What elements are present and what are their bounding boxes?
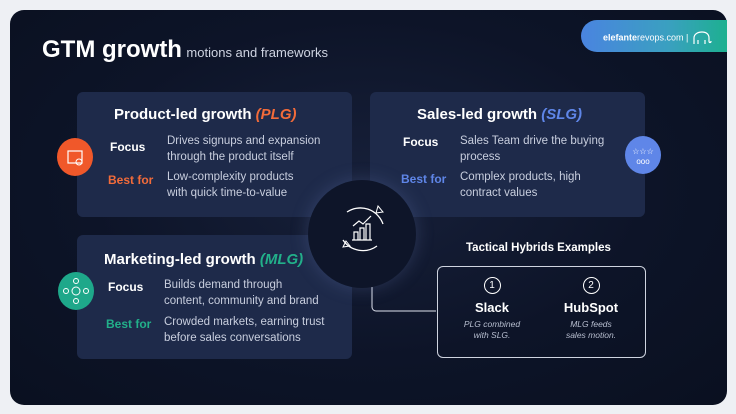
- icon: SLG team: [625, 136, 661, 174]
- panel: PLG: Focus: [110, 140, 145, 154]
- heading: tactical hybrids: Tactical Hybrids Examples: [466, 242, 611, 254]
- example: HubSpot: [564, 277, 618, 340]
- icon: SLG team: ооо: [636, 157, 650, 166]
- arrow: connector: [372, 287, 436, 312]
- panel: SLG: Complex products, high: [460, 171, 581, 183]
- panel: SLG: contract values: [460, 186, 537, 198]
- panel: PLG: Best for: [108, 173, 153, 187]
- panel: MLG: before sales conversations: [164, 332, 301, 344]
- panel: hybrid examples: [437, 266, 646, 358]
- panel: SLG: Sales-led growth (SLG): [417, 106, 582, 123]
- panel: PLG: with quick time-to-value: [167, 186, 287, 198]
- example: Slack: [464, 277, 520, 340]
- panel: PLG: [77, 92, 352, 217]
- panel: MLG: Focus: [108, 280, 143, 294]
- example: Slack: PLG combined: [464, 319, 520, 329]
- example: Slack: with SLG.: [474, 330, 510, 340]
- panel: SLG: Sales Team drive the buying: [460, 135, 604, 147]
- panel: SLG: process: [460, 150, 500, 162]
- title: GTM growth motions and frameworks: [42, 36, 328, 63]
- logo badge: elefanterevops.com |: [603, 32, 688, 42]
- panel: PLG: Low-complexity products: [167, 171, 294, 183]
- icon: SLG team: ☆☆☆: [632, 147, 654, 156]
- example: HubSpot: HubSpot: [564, 300, 618, 315]
- icon: center growth circle: [308, 180, 416, 288]
- logo badge: [581, 20, 727, 52]
- panel: PLG: through the product itself: [167, 150, 294, 162]
- panel: MLG: content, community and brand: [164, 294, 319, 306]
- example: Slack: 1: [489, 280, 495, 291]
- panel: SLG: Focus: [403, 135, 438, 149]
- panel: PLG: Drives signups and expansion: [167, 135, 320, 147]
- icon: MLG network: [58, 272, 94, 310]
- panel: PLG: Product-led growth (PLG): [114, 106, 296, 123]
- example: HubSpot: 2: [588, 280, 594, 291]
- panel: SLG: Best for: [401, 172, 446, 186]
- panel: MLG: Marketing-led growth (MLG): [104, 251, 303, 268]
- example: Slack: Slack: [475, 300, 509, 315]
- panel: SLG: [370, 92, 645, 217]
- panel: MLG: Builds demand through: [164, 279, 282, 291]
- example: HubSpot: MLG feeds: [570, 319, 612, 329]
- example: HubSpot: sales motion.: [566, 330, 616, 340]
- panel: MLG: Crowded markets, earning trust: [164, 316, 324, 328]
- panel: MLG: Best for: [106, 317, 151, 331]
- panel: MLG: [77, 235, 352, 359]
- icon: PLG box: [57, 138, 93, 176]
